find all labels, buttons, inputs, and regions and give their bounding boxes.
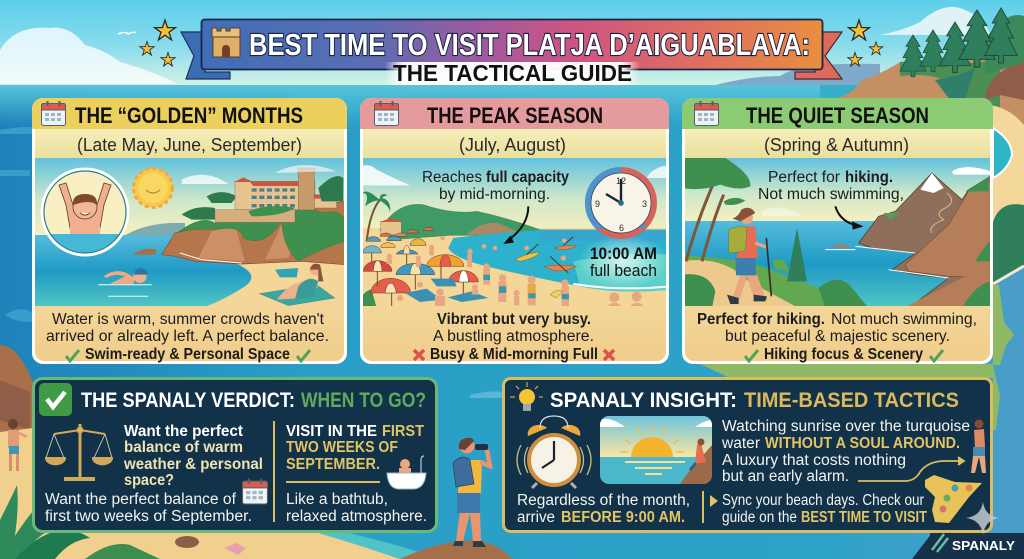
heading: verdict: WHEN TO GO? [301, 389, 426, 412]
sync text: guide on the [722, 509, 797, 526]
icon: calendar [694, 101, 718, 126]
sunrise text: A luxury that costs nothing [722, 452, 906, 469]
verdict: hiking: Hiking focus & Scenery [764, 346, 923, 363]
panel: quiet season [682, 98, 993, 364]
label: 10:00 AM full beach: full beach [590, 261, 657, 280]
arrow to woman [858, 457, 964, 481]
icon: calendar [374, 101, 398, 126]
question text: Want the perfect [124, 423, 243, 440]
description: peak: A bustling atmosphere. [433, 328, 594, 345]
relaxed text: Like a bathtub, [286, 491, 388, 508]
months text: (Spring & Autumn) [764, 135, 909, 155]
question text [123, 423, 263, 489]
relaxed text: relaxed atmosphere. [286, 508, 427, 525]
heading: quiet: THE QUIET SEASON [746, 103, 929, 128]
heading: verdict: THE SPANALY VERDICT: [81, 389, 295, 412]
icon: map of Spain [925, 475, 982, 523]
panel: spanaly insight [504, 378, 992, 532]
callout: hiking text: Not much swimming, [758, 186, 904, 203]
panel: golden months [32, 98, 347, 364]
months text: (July, August) [459, 135, 566, 155]
label: 10:00 AM full beach: 10:00 AM [590, 244, 657, 263]
icon: wall clock 10:00 [585, 167, 657, 239]
timing text: BEFORE 9:00 AM. [561, 509, 685, 526]
icon: alarm clock [517, 416, 591, 488]
icon: smiling sun [134, 168, 172, 208]
title banner [181, 20, 842, 86]
sunrise text: water [721, 435, 760, 452]
figure: woman on beach [971, 420, 986, 473]
heading: peak: THE PEAK SEASON [427, 103, 603, 128]
description: quiet: Not much swimming, [831, 311, 977, 328]
description: golden: Water is warm, summer crowds haven't [52, 311, 325, 328]
callout: hiking text: Perfect for [768, 169, 840, 186]
icon: light bulb [510, 382, 543, 411]
decorative sparkle [966, 502, 999, 535]
heading: golden: THE “GOLDEN” MONTHS [75, 103, 303, 128]
description: peak: Vibrant but very busy. [437, 311, 591, 328]
decorative trees: pines top right [900, 8, 1017, 77]
sunrise text [721, 418, 970, 485]
left beach figure [8, 419, 27, 471]
description: golden: arrived or already left. A perfect balance. [46, 328, 329, 345]
title castle icon [212, 28, 240, 57]
icon: bathtub [387, 456, 426, 489]
description: quiet: but peaceful & majestic scenery. [725, 328, 950, 345]
callout: hiking text [758, 169, 904, 203]
answer text left [45, 491, 252, 525]
icon: green check [39, 383, 72, 416]
sunrise text: WITHOUT A SOUL AROUND. [765, 435, 960, 452]
timing text: Regardless of the month, [517, 492, 690, 509]
callout: full capacity text: full capacity [486, 169, 569, 186]
sunrise text: but an early alarm. [722, 468, 849, 485]
recommendation text [286, 423, 424, 473]
callout: hiking text: hiking. [845, 169, 893, 186]
zoom circle: happy swimmer [40, 169, 130, 264]
timing text [517, 492, 690, 526]
relaxed text [286, 491, 427, 525]
months text: (Late May, June, September) [77, 135, 302, 155]
illustration: crowded beach [360, 158, 670, 308]
callout: full capacity text [422, 169, 569, 203]
sync text: BEST TIME TO VISIT [801, 509, 927, 526]
question text: balance of warm [124, 439, 243, 456]
description: golden [46, 311, 329, 345]
description: quiet [697, 311, 977, 345]
recommendation text: FIRST [382, 423, 424, 440]
heading: insight: SPANALY INSIGHT: [550, 389, 737, 412]
question text: space? [124, 472, 174, 489]
recommendation text: SEPTEMBER. [286, 456, 380, 473]
heading: insight: TIME-BASED TACTICS [744, 389, 959, 412]
icon: calendar [243, 478, 267, 504]
recommendation text: VISIT IN THE [286, 423, 377, 440]
illustration: sunrise [600, 416, 712, 485]
question text: weather & personal [123, 456, 263, 473]
icon: wall clock 10:00: 12 [616, 176, 626, 186]
icon: balance scale [46, 424, 112, 479]
icon: wall clock 10:00: 9 [595, 199, 600, 209]
sunrise text: Watching sunrise over the turquoise [722, 418, 970, 435]
icon: calendar [42, 101, 66, 126]
icon: wall clock 10:00: 3 [642, 199, 647, 209]
illustration: coast hotel and swimmers [35, 158, 345, 308]
description: peak [433, 311, 594, 345]
stars right [848, 20, 883, 66]
title banner: THE TACTICAL GUIDE [393, 60, 632, 86]
callout: full capacity text: by mid-morning. [439, 186, 550, 203]
figure: hiker with binoculars [453, 438, 490, 547]
title banner: BEST TIME TO VISIT PLATJA D’AIGUABLAVA: [249, 27, 810, 62]
callout: full capacity text: Reaches [422, 169, 482, 186]
panel: peak season [360, 98, 670, 364]
panel: spanaly verdict [34, 378, 436, 532]
heading: insight [550, 389, 959, 412]
recommendation text: TWO WEEKS OF [286, 439, 398, 456]
label: 10:00 AM full beach [590, 244, 657, 280]
description: quiet: Perfect for hiking. [697, 311, 825, 328]
answer text left: first two weeks of September. [45, 508, 252, 525]
verdict: busy: Busy & Mid-morning Full [430, 346, 598, 363]
illustration: hiker and mountain [682, 158, 990, 308]
logo: spanaly: SPANALY [952, 538, 1015, 553]
sync text [722, 492, 927, 526]
stars left [140, 20, 175, 66]
logo: spanaly [932, 534, 1015, 553]
timing text: arrive [517, 509, 555, 526]
sync text: Sync your beach days. Check our [722, 492, 924, 509]
icon: wall clock 10:00: 6 [619, 223, 624, 233]
answer text left: Want the perfect balance of [45, 491, 237, 508]
verdict: swim-ready: Swim-ready & Personal Space [85, 346, 290, 363]
